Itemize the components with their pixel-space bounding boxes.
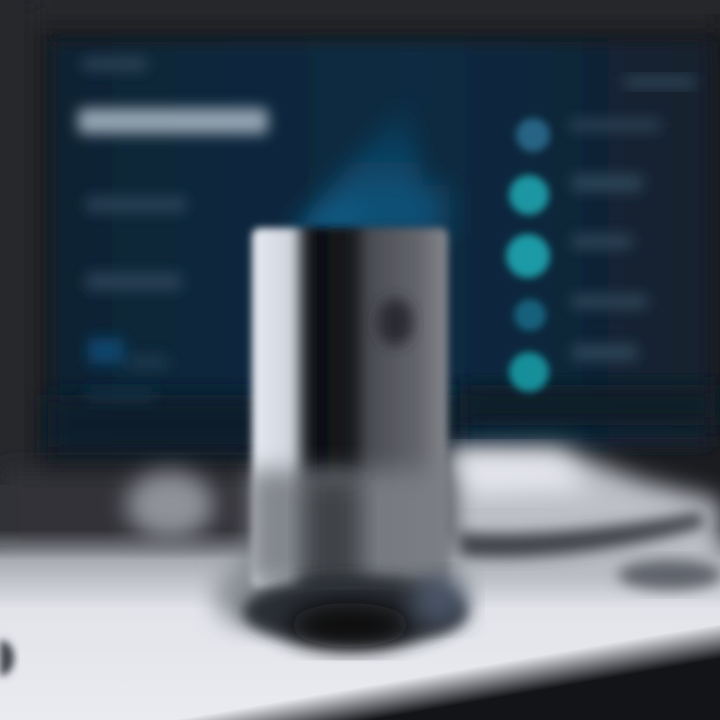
device: sensor [377, 298, 413, 346]
screen: teal status dots [506, 118, 550, 392]
screen: left text lines [86, 197, 186, 400]
screen: title [78, 108, 268, 134]
screen: blue chart glow [290, 100, 450, 235]
monitor screen [48, 42, 715, 455]
screen: right text lines [570, 120, 660, 360]
device: cylinder body [248, 228, 452, 590]
screen: top right label [625, 76, 695, 88]
device: base [243, 576, 468, 648]
desk surface [0, 470, 720, 720]
screen: header text left [78, 58, 268, 134]
device: lower band [248, 470, 452, 585]
cables and desk objects [0, 448, 720, 676]
